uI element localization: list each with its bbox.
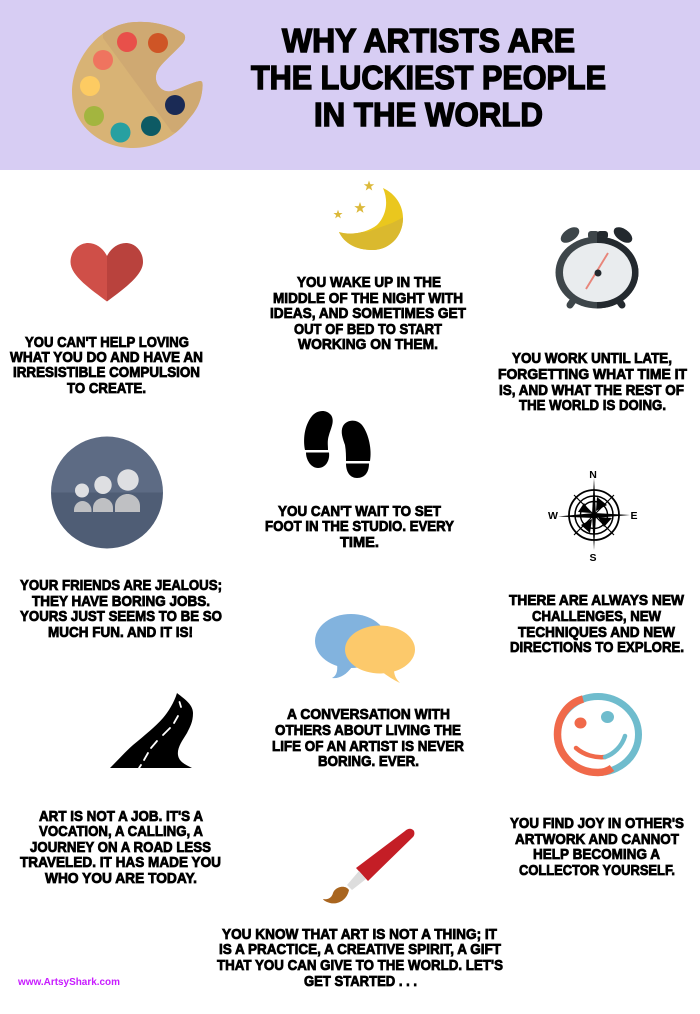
text: new challenges xyxy=(509,592,685,656)
text: friends are jealous: YOURS JUST SEEMS TO BE SO xyxy=(20,608,222,625)
text: art is a practice: GET STARTED . . . xyxy=(304,973,417,990)
text: new challenges: CHALLENGES, NEW xyxy=(532,608,662,625)
text: joy in others' artwork xyxy=(510,815,684,879)
icon: speech bubbles xyxy=(315,614,415,683)
text: conversation: A CONVERSATION WITH xyxy=(287,706,450,723)
text: work until late: FORGETTING WHAT TIME IT xyxy=(498,366,687,383)
text: joy in others' artwork: HELP BECOMING A xyxy=(533,846,660,863)
text: art is a vocation: ART IS NOT A JOB. IT'S A xyxy=(39,808,203,825)
text: new challenges: THERE ARE ALWAYS NEW xyxy=(509,592,685,609)
icon: compass: E xyxy=(630,510,638,522)
text: wake up at night: WORKING ON THEM. xyxy=(298,336,438,353)
text: friends are jealous: YOUR FRIENDS ARE JEALOUS; xyxy=(20,577,222,594)
text: set foot in the studio: TIME. xyxy=(340,534,379,551)
text: work until late: IS, AND WHAT THE REST OF xyxy=(499,382,684,399)
title: THE LUCKIEST PEOPLE xyxy=(251,59,606,96)
text: art is a practice: YOU KNOW THAT ART IS NOT A THING; IT xyxy=(222,926,497,943)
icon: group of people xyxy=(51,437,163,548)
text: art is a vocation: JOURNEY ON A ROAD LESS xyxy=(30,839,211,856)
text: friends are jealous: THEY HAVE BORING JOBS. xyxy=(32,593,210,610)
icon: footprints xyxy=(304,411,371,478)
text: art is a practice: THAT YOU CAN GIVE TO THE WORLD. LET'S xyxy=(217,957,503,974)
text: work until late: YOU WORK UNTIL LATE, xyxy=(512,350,672,367)
text: loving what you do xyxy=(10,334,203,397)
header band xyxy=(0,0,700,170)
icon: alarm clock xyxy=(556,224,638,308)
text: set foot in the studio: YOU CAN'T WAIT TO SET xyxy=(278,503,441,520)
text: loving what you do: TO CREATE. xyxy=(67,380,146,397)
title xyxy=(251,22,606,133)
text: set foot in the studio xyxy=(265,503,454,551)
text: wake up at night: IDEAS, AND SOMETIMES GET xyxy=(270,305,466,322)
text: loving what you do: IRRESISTIBLE COMPULSION xyxy=(13,364,200,381)
text: wake up at night: YOU WAKE UP IN THE xyxy=(297,274,441,291)
text: joy in others' artwork: COLLECTOR YOURSELF. xyxy=(519,862,675,879)
title: WHY ARTISTS ARE xyxy=(282,22,575,59)
icon: winding road xyxy=(110,693,193,768)
text: conversation: BORING. EVER. xyxy=(318,753,419,770)
text: work until late xyxy=(498,350,687,414)
text: wake up at night xyxy=(270,274,466,353)
text: conversation xyxy=(272,706,464,770)
text: conversation: OTHERS ABOUT LIVING THE xyxy=(275,722,461,739)
text: friends are jealous: MUCH FUN. AND IT IS! xyxy=(48,624,193,641)
icon: artist palette xyxy=(72,22,203,148)
icon: compass: S xyxy=(589,552,597,564)
icon: moon and stars xyxy=(333,180,403,250)
title: IN THE WORLD xyxy=(314,96,543,133)
text: art is a practice xyxy=(217,926,503,990)
text: loving what you do: WHAT YOU DO AND HAVE AN xyxy=(10,349,203,366)
text: art is a vocation: TRAVELED. IT HAS MADE YOU xyxy=(20,854,221,871)
icon: smiley face xyxy=(558,696,638,772)
text: joy in others' artwork: YOU FIND JOY IN OTHER'S xyxy=(510,815,684,832)
text: art is a vocation: WHO YOU ARE TODAY. xyxy=(45,870,197,887)
text: loving what you do: YOU CAN'T HELP LOVING xyxy=(25,334,189,351)
text: new challenges: TECHNIQUES AND NEW xyxy=(518,624,676,641)
text: conversation: LIFE OF AN ARTIST IS NEVER xyxy=(272,738,464,755)
text: set foot in the studio: FOOT IN THE STUDIO. EVERY xyxy=(265,518,454,535)
text: wake up at night: OUT OF BED TO START xyxy=(294,321,442,338)
text: joy in others' artwork: ARTWORK AND CANNOT xyxy=(515,831,679,848)
text: friends are jealous xyxy=(20,577,222,641)
website credit: www.ArtsyShark.com xyxy=(17,977,120,988)
icon: compass xyxy=(548,469,638,564)
icon: compass: N xyxy=(589,469,597,481)
text: wake up at night: MIDDLE OF THE NIGHT WITH xyxy=(273,290,463,307)
text: work until late: THE WORLD IS DOING. xyxy=(519,397,666,414)
text: art is a practice: IS A PRACTICE, A CREATIVE SPIRIT, A GIFT xyxy=(219,941,501,958)
text: art is a vocation: VOCATION, A CALLING, A xyxy=(39,823,203,840)
icon: compass: W xyxy=(548,510,558,522)
text: art is a vocation xyxy=(20,808,221,887)
icon: heart xyxy=(70,243,143,302)
icon: paint brush xyxy=(323,829,414,903)
